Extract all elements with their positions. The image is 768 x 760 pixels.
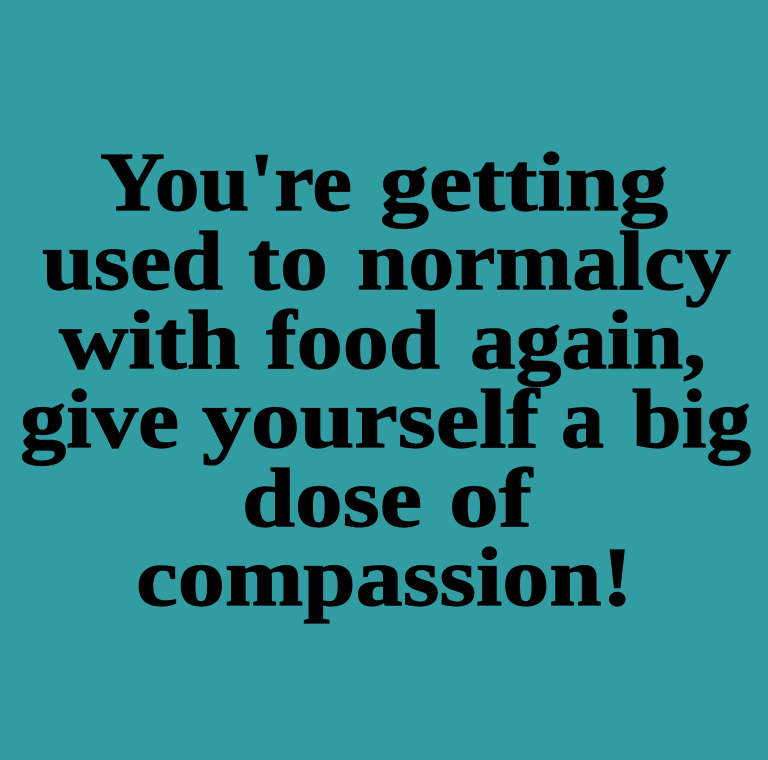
heading text: compassion! — [136, 531, 633, 624]
heading text: with — [59, 294, 240, 387]
heading text: a — [561, 373, 604, 466]
heading text: normalcy — [357, 215, 731, 308]
heading text: You're — [100, 136, 352, 229]
heading text: of — [449, 452, 533, 545]
heading text: used — [42, 215, 223, 308]
heading text: yourself — [202, 373, 540, 466]
heading text — [20, 136, 751, 624]
heading text: big — [632, 373, 751, 466]
heading text: give — [20, 373, 179, 466]
heading text: food — [266, 294, 440, 387]
heading text: getting — [380, 136, 668, 229]
heading text: dose — [242, 452, 422, 545]
heading text: to — [248, 215, 328, 308]
heading text: again, — [470, 294, 706, 387]
